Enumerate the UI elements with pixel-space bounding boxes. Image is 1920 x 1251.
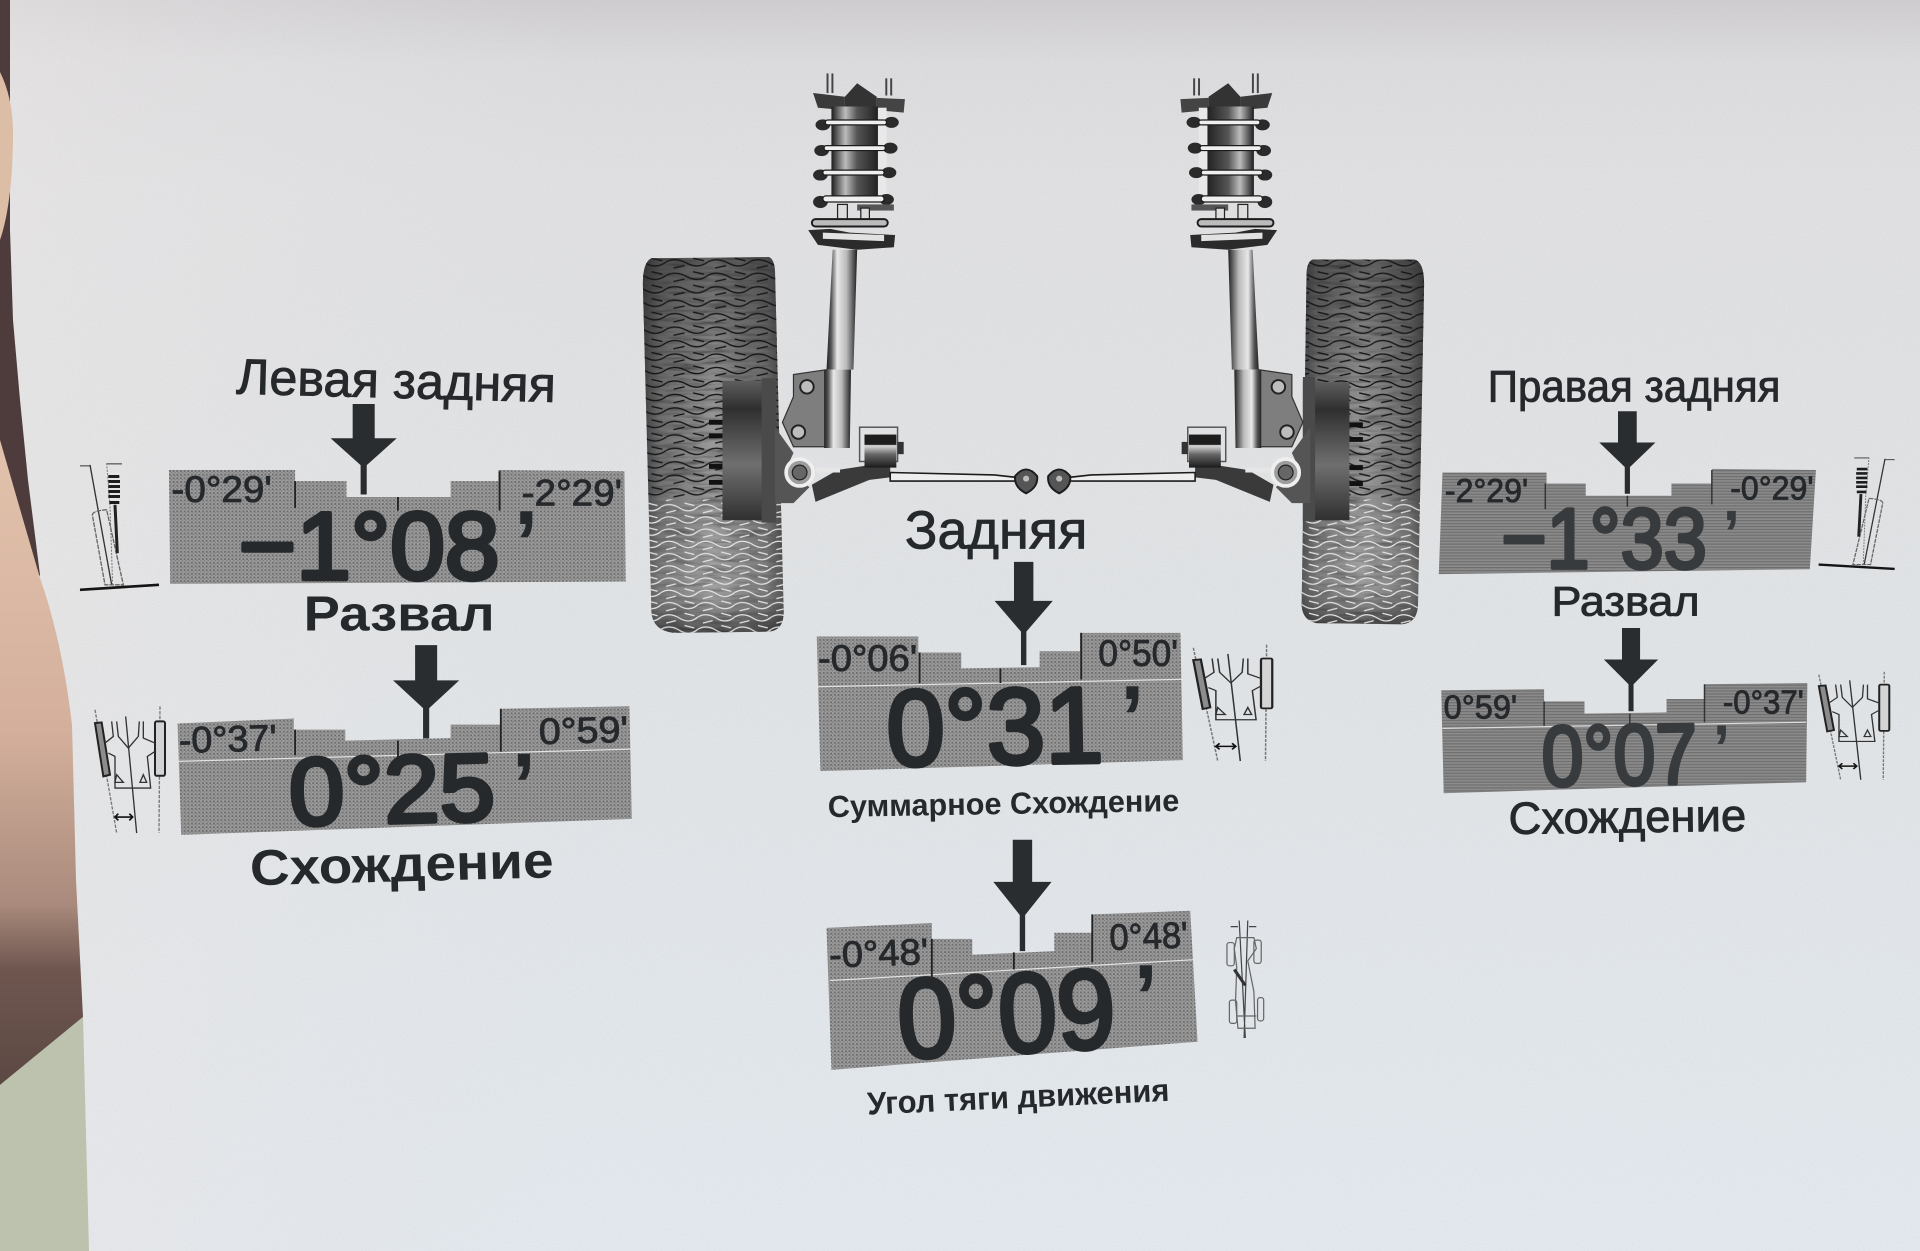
panel: left camber gauge: -0°29' — [171, 469, 272, 510]
icon: car thrust — [1227, 921, 1264, 1038]
panel: left camber gauge: , — [514, 447, 538, 543]
label: left toe: Схождение — [249, 832, 554, 896]
arrow: left toe — [393, 645, 459, 738]
icon: left camber — [80, 463, 159, 590]
label: thrust angle: Угол тяги движения — [866, 1072, 1170, 1122]
right tire — [1298, 255, 1430, 627]
panel: left toe gauge: , — [512, 689, 536, 785]
icon: total toe — [1193, 645, 1272, 761]
heading: right rear: Правая задняя — [1488, 363, 1780, 412]
panel: thrust angle gauge: , — [1134, 901, 1158, 997]
panel: right camber gauge: -2°29' — [1445, 473, 1528, 510]
panel: left camber gauge — [169, 447, 626, 600]
background: hand and clothing at left edge — [0, 0, 89, 1251]
panel: thrust angle gauge: 0°48' — [1109, 914, 1188, 958]
panel: thrust angle gauge: -0°48' — [828, 931, 929, 976]
arrow: total toe — [995, 562, 1053, 665]
panel: left toe gauge: 0°59' — [538, 709, 629, 752]
arrow: thrust angle — [993, 840, 1052, 951]
left brake hub — [709, 378, 776, 523]
right strut and tie rod — [1048, 73, 1310, 503]
left tire — [637, 255, 790, 634]
panel: left camber gauge: -2°29' — [522, 473, 622, 514]
panel: right camber gauge — [1439, 465, 1816, 587]
heading: rear axle: Задняя — [905, 500, 1087, 560]
panel: left toe gauge — [178, 689, 632, 846]
panel: right camber gauge: −1°33 — [1501, 491, 1707, 587]
arrow: right toe — [1604, 628, 1658, 711]
panel: right toe gauge: 0°59' — [1444, 690, 1517, 727]
panel: right camber gauge: -0°29' — [1730, 470, 1813, 507]
panel: total toe gauge: 0°31 — [885, 664, 1104, 789]
panel: total toe gauge: , — [1120, 622, 1144, 718]
panel: left toe gauge: -0°37' — [178, 717, 277, 761]
panel: total toe gauge — [817, 622, 1183, 789]
label: right toe: Схождение — [1508, 790, 1746, 844]
label: right camber: Развал — [1551, 578, 1700, 625]
label: left camber: Развал — [304, 587, 495, 641]
panel: right toe gauge: , — [1713, 679, 1730, 747]
panel: left camber gauge: −1°08 — [239, 494, 500, 600]
panel: right toe gauge: -0°37' — [1723, 685, 1804, 722]
arrow: left camber — [331, 404, 397, 495]
panel: total toe gauge: 0°50' — [1098, 633, 1178, 674]
right brake hub — [1303, 377, 1363, 521]
arrow: right camber — [1599, 411, 1655, 494]
panel: thrust angle gauge — [827, 901, 1198, 1082]
panel: thrust angle gauge: 0°09 — [894, 945, 1119, 1082]
panel: left toe gauge: 0°25 — [288, 735, 496, 846]
panel: right camber gauge: , — [1723, 465, 1740, 533]
icon: right camber — [1819, 457, 1895, 569]
icon: right toe — [1819, 672, 1889, 780]
suspension illustration — [637, 73, 1430, 634]
panel: total toe gauge: -0°06' — [818, 638, 917, 679]
panel: right toe gauge: 0°07 — [1541, 706, 1698, 805]
label: total toe: Суммарное Схождение — [828, 784, 1179, 824]
icon: left toe — [95, 706, 165, 833]
heading: left rear: Левая задняя — [236, 349, 557, 413]
left strut and tie rod — [775, 73, 1037, 503]
panel: right toe gauge — [1441, 679, 1807, 805]
